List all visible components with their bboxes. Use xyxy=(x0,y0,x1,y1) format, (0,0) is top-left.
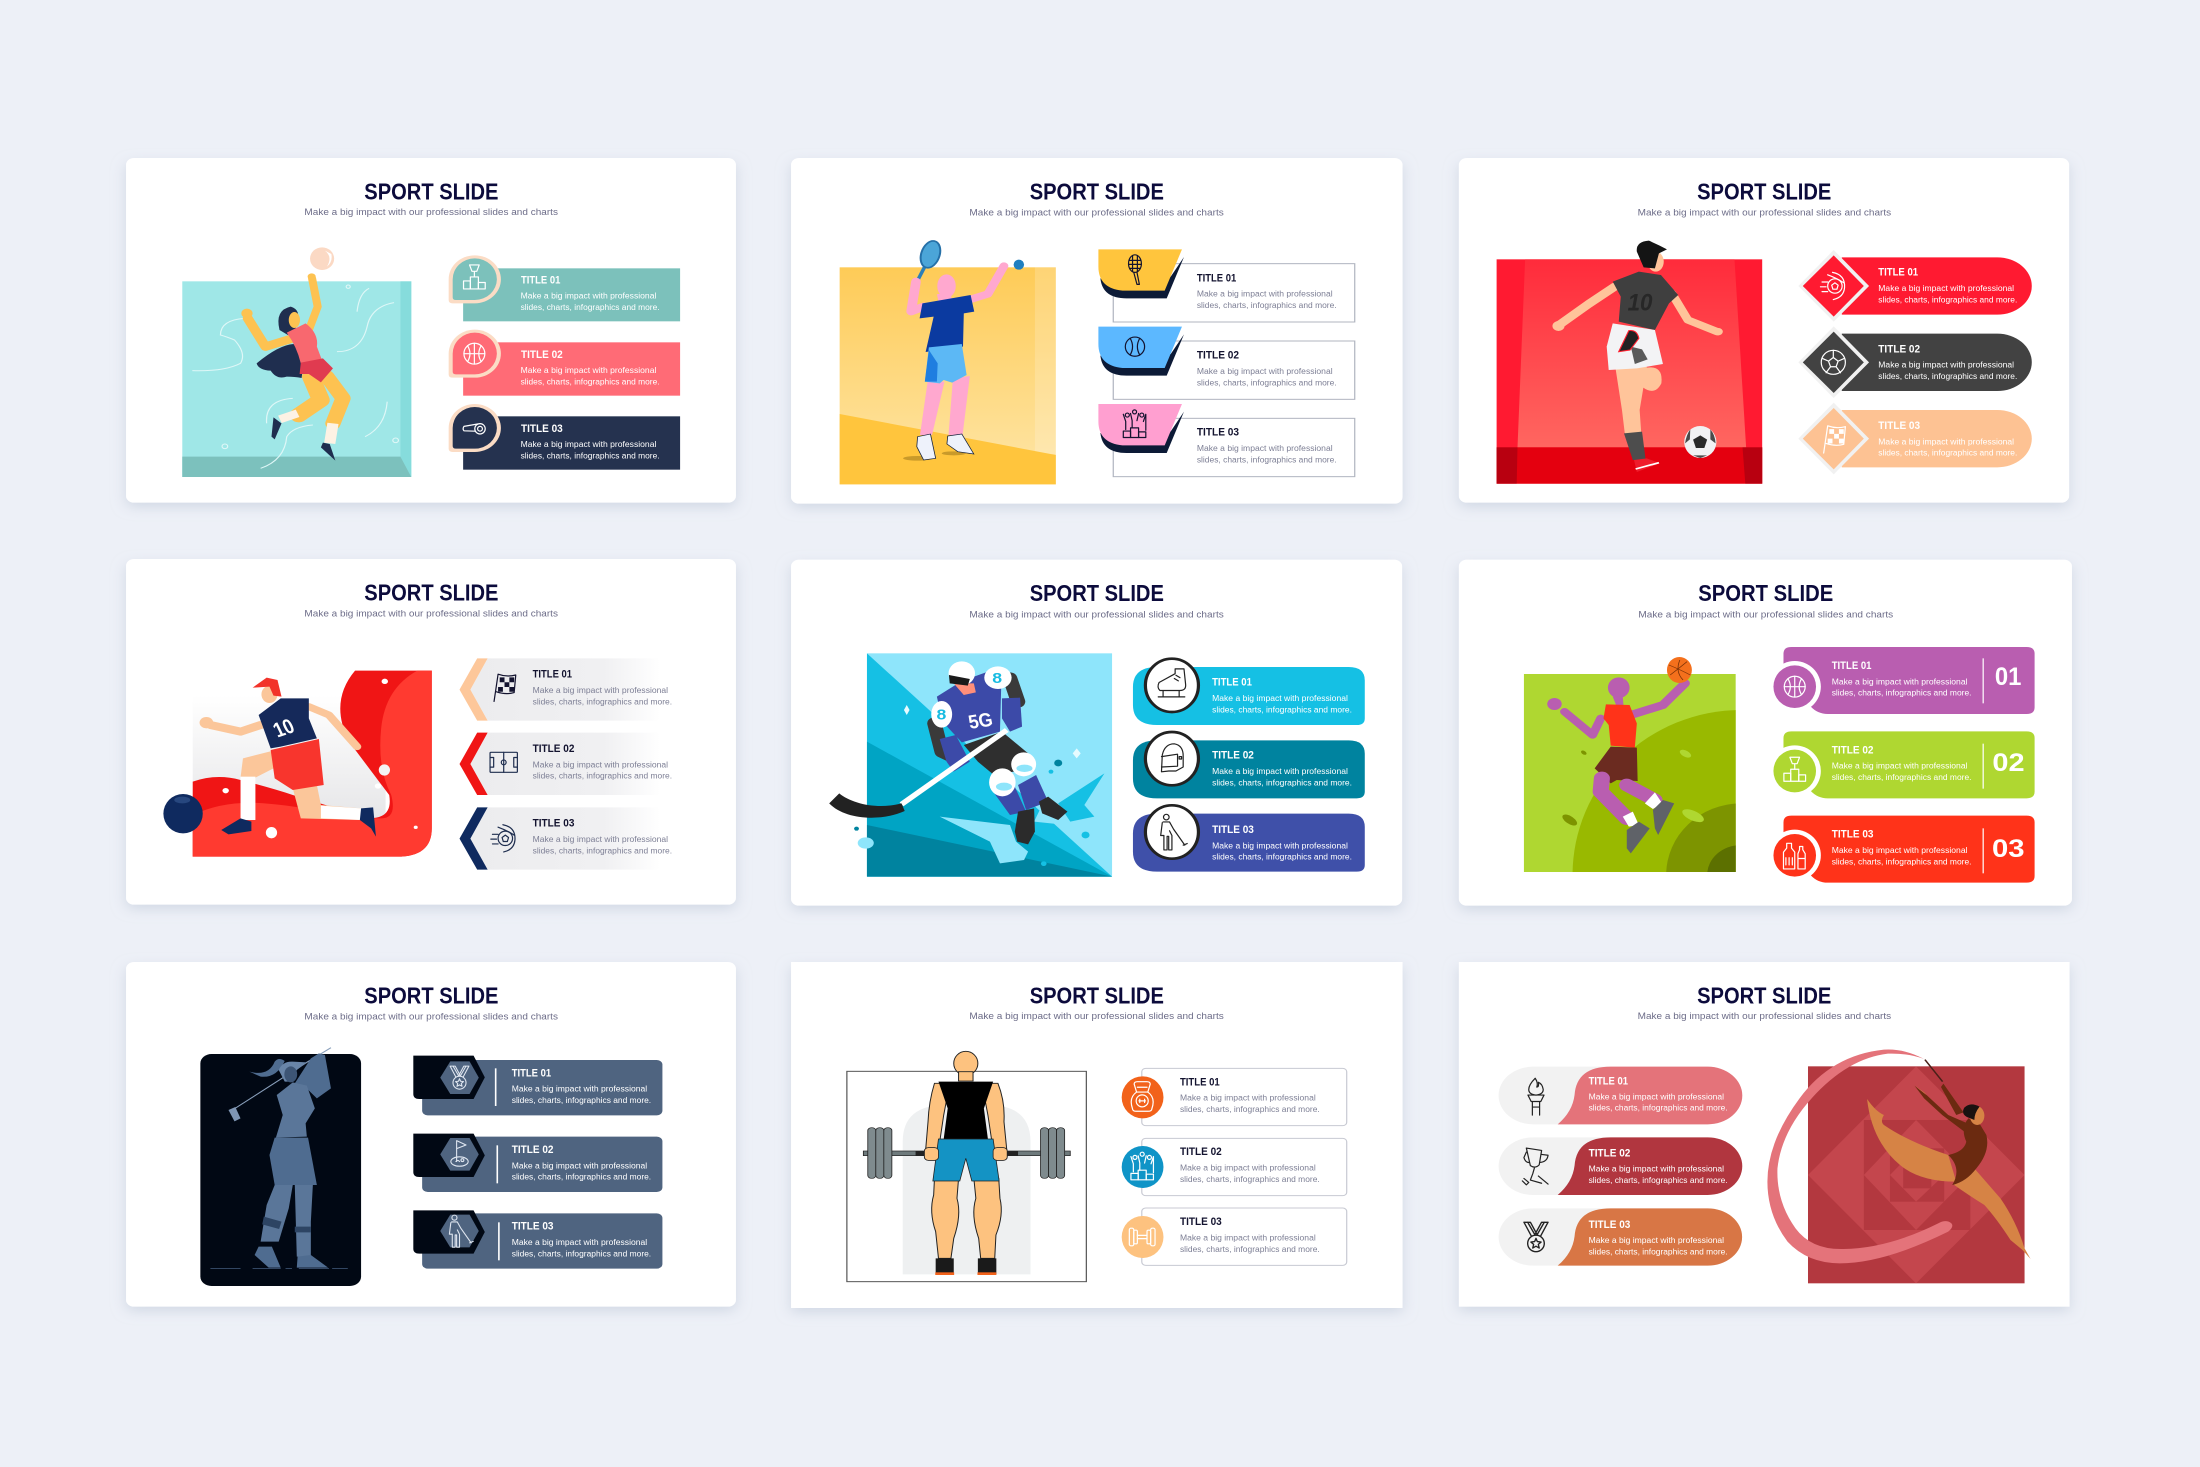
card: title 03: TITLE 03 xyxy=(1878,419,1920,432)
card: title 01: slides, charts, infographics and more. xyxy=(533,697,672,706)
heading: SPORT SLIDE xyxy=(1697,180,1831,205)
card: title 01: TITLE 01 xyxy=(1180,1075,1220,1088)
card: title 03: slides, charts, infographics and more. xyxy=(1212,852,1352,861)
card: title 03 xyxy=(1769,816,2035,883)
card: title 03: slides, charts, infographics and more. xyxy=(1878,448,2017,457)
card: title 01: TITLE 01 xyxy=(512,1066,551,1079)
card: title 02: Make a big impact with professional xyxy=(1197,367,1333,376)
heading: SPORT SLIDE xyxy=(1030,984,1164,1009)
card: title 01 xyxy=(449,255,680,321)
card: title 01 xyxy=(460,658,672,721)
panel: football kick slide xyxy=(126,559,736,905)
heading xyxy=(969,180,1224,218)
heading: Make a big impact with our professional slides and charts xyxy=(1638,1012,1891,1022)
card: title 01 xyxy=(1098,249,1355,322)
heading: SPORT SLIDE xyxy=(1030,180,1164,205)
illustration: hockey player: 5G xyxy=(966,709,995,733)
panel: soccer slide xyxy=(1459,158,2069,503)
illustration: soccer player: 10 xyxy=(1628,289,1653,316)
heading: Make a big impact with our professional slides and charts xyxy=(969,610,1224,620)
card: title 02 xyxy=(1499,1137,1742,1195)
card: title 03: TITLE 03 xyxy=(1197,426,1239,438)
illustration: volleyball player xyxy=(182,247,411,477)
heading: Make a big impact with our professional slides and charts xyxy=(969,208,1224,218)
card: title 01: Make a big impact with professional xyxy=(1832,677,1968,686)
card: title 03: Make a big impact with professional xyxy=(1197,444,1333,453)
card: title 03: TITLE 03 xyxy=(512,1220,554,1232)
card: title 01: slides, charts, infographics and more. xyxy=(1180,1105,1320,1114)
card: title 01: TITLE 01 xyxy=(1212,676,1252,688)
card: title 01 xyxy=(1122,1068,1347,1126)
card: title 02: TITLE 02 xyxy=(533,742,575,755)
card: title 01: slides, charts, infographics and more. xyxy=(512,1096,651,1105)
card: title 02: TITLE 02 xyxy=(1589,1147,1631,1159)
card: title 01: TITLE 01 xyxy=(1878,266,1918,278)
heading xyxy=(969,581,1224,620)
heading: Make a big impact with our professional slides and charts xyxy=(304,1012,558,1022)
heading: Make a big impact with our professional slides and charts xyxy=(1638,610,1893,620)
card: title 02: TITLE 02 xyxy=(1212,749,1254,761)
card: title 03: slides, charts, infographics and more. xyxy=(1589,1247,1728,1256)
card: title 02 xyxy=(1133,732,1365,798)
card: title 02: Make a big impact with professional xyxy=(1878,360,2014,369)
card: title 01: TITLE 01 xyxy=(1589,1074,1628,1087)
card: title 02: slides, charts, infographics and more. xyxy=(521,377,660,386)
card: title 03: Make a big impact with professional xyxy=(1180,1233,1316,1242)
card: title 02: Make a big impact with professional xyxy=(512,1161,647,1170)
card: title 01: TITLE 01 xyxy=(1832,659,1872,672)
card: title 01: TITLE 01 xyxy=(1197,271,1237,284)
card: title 02 xyxy=(1122,1138,1347,1196)
illustration: football player: 10 xyxy=(269,714,298,742)
card: title 02: slides, charts, infographics and more. xyxy=(512,1172,651,1181)
card: title 02: Make a big impact with professional xyxy=(533,760,668,769)
heading: SPORT SLIDE xyxy=(1697,984,1831,1009)
heading xyxy=(1638,180,1891,218)
illustration: weightlifter xyxy=(847,1051,1086,1282)
card: title 02: slides, charts, infographics and more. xyxy=(533,771,672,780)
card: title 01 xyxy=(413,1056,662,1115)
card: title 03 xyxy=(1133,805,1365,872)
card: title 02: Make a big impact with professional xyxy=(1832,761,1968,770)
card: title 02 xyxy=(449,330,680,396)
card: title 03 xyxy=(1798,403,2032,474)
card: title 03 xyxy=(460,807,672,870)
heading: SPORT SLIDE xyxy=(364,179,498,205)
card: title 01: Make a big impact with professional xyxy=(1197,289,1333,298)
illustration: football player xyxy=(163,671,432,857)
card: title 01 xyxy=(1499,1067,1742,1124)
illustration: tennis player xyxy=(840,239,1056,484)
panel: basketball slide xyxy=(1455,560,2076,914)
card: title 02 xyxy=(413,1134,662,1192)
card: title 03 xyxy=(1499,1208,1742,1266)
card: title 03: slides, charts, infographics and more. xyxy=(521,451,660,460)
card: title 02: slides, charts, infographics and more. xyxy=(1180,1175,1320,1184)
heading: SPORT SLIDE xyxy=(1030,581,1164,606)
card: title 02 xyxy=(1798,326,2032,398)
card: title 03: slides, charts, infographics and more. xyxy=(533,846,672,855)
card: title 01: Make a big impact with professional xyxy=(1180,1093,1316,1102)
heading: SPORT SLIDE xyxy=(1698,581,1833,606)
illustration: rhythmic gymnast xyxy=(1767,1050,2031,1283)
card: title 03: Make a big impact with professional xyxy=(1589,1236,1724,1245)
card: title 03: TITLE 03 xyxy=(1212,823,1254,836)
card: title 02: Make a big impact with professional xyxy=(1212,767,1348,776)
card: title 01: slides, charts, infographics and more. xyxy=(1197,301,1337,310)
card: title 01: slides, charts, infographics and more. xyxy=(521,303,660,312)
card: title 03: TITLE 03 xyxy=(521,422,563,435)
illustration: golfer xyxy=(200,1048,361,1286)
card: title 02 xyxy=(460,733,672,795)
card: title 02: slides, charts, infographics and more. xyxy=(1832,773,1972,782)
heading xyxy=(304,179,558,218)
card: title 01: 01 xyxy=(1995,662,2021,690)
card: title 02: slides, charts, infographics and more. xyxy=(1197,378,1337,387)
card: title 01: Make a big impact with professional xyxy=(1878,284,2014,293)
card: title 02 xyxy=(1098,327,1355,399)
card: title 03: Make a big impact with professional xyxy=(1878,437,2014,446)
card: title 03: slides, charts, infographics and more. xyxy=(512,1249,651,1258)
card: title 02: 02 xyxy=(1992,748,2025,776)
panel: ice hockey slide xyxy=(791,560,1402,906)
card: title 01: TITLE 01 xyxy=(533,668,572,680)
card: title 02: TITLE 02 xyxy=(1197,349,1239,361)
card: title 03: Make a big impact with professional xyxy=(512,1238,647,1247)
heading: Make a big impact with our professional slides and charts xyxy=(1638,208,1891,218)
card: title 02: TITLE 02 xyxy=(512,1143,554,1156)
card: title 03: slides, charts, infographics and more. xyxy=(1197,455,1337,464)
panel: weightlifting slide xyxy=(791,962,1403,1308)
card: title 01: slides, charts, infographics and more. xyxy=(1878,295,2017,304)
heading: Make a big impact with our professional slides and charts xyxy=(969,1012,1224,1022)
card: title 01: Make a big impact with professional xyxy=(1589,1092,1724,1101)
heading xyxy=(1638,984,1891,1022)
card: title 01: slides, charts, infographics and more. xyxy=(1589,1103,1728,1112)
card: title 02: TITLE 02 xyxy=(1180,1145,1222,1158)
card: title 03: TITLE 03 xyxy=(1180,1215,1222,1228)
card: title 03: slides, charts, infographics and more. xyxy=(1832,857,1972,866)
card: title 03: Make a big impact with professional xyxy=(521,440,656,449)
heading xyxy=(304,580,558,619)
illustration: soccer player xyxy=(1497,241,1762,484)
card: title 02: Make a big impact with professional xyxy=(521,366,656,375)
card: title 02 xyxy=(1769,731,2035,798)
card: title 01: Make a big impact with professional xyxy=(533,686,668,695)
card: title 03: Make a big impact with professional xyxy=(533,835,668,844)
card: title 03 xyxy=(1122,1208,1347,1265)
heading xyxy=(969,984,1224,1022)
heading: Make a big impact with our professional slides and charts xyxy=(304,208,558,218)
card: title 03: TITLE 03 xyxy=(1832,828,1874,840)
panel: volleyball slide xyxy=(126,158,736,503)
card: title 01: Make a big impact with professional xyxy=(521,291,656,300)
heading: SPORT SLIDE xyxy=(364,580,498,606)
card: title 03: slides, charts, infographics and more. xyxy=(1180,1245,1320,1254)
illustration: basketball player xyxy=(1524,657,1736,872)
heading xyxy=(304,984,558,1022)
illustration: hockey player: 8 xyxy=(992,670,1002,687)
card: title 03: 03 xyxy=(1992,834,2025,862)
card: title 01: slides, charts, infographics and more. xyxy=(1832,688,1972,697)
card: title 02: Make a big impact with professional xyxy=(1589,1164,1724,1173)
card: title 03: Make a big impact with professional xyxy=(1212,841,1348,850)
card: title 01: TITLE 01 xyxy=(521,274,561,286)
card: title 03: Make a big impact with professional xyxy=(1832,846,1968,855)
illustration: hockey player xyxy=(829,653,1112,877)
card: title 02: TITLE 02 xyxy=(521,348,563,361)
panel: rhythmic gymnastics slide xyxy=(1459,962,2070,1307)
card: title 03: TITLE 03 xyxy=(533,817,575,829)
card: title 02: slides, charts, infographics and more. xyxy=(1878,372,2017,381)
card: title 03 xyxy=(413,1210,662,1269)
card: title 01 xyxy=(1769,647,2035,714)
heading xyxy=(1638,581,1893,620)
card: title 01: slides, charts, infographics and more. xyxy=(1212,705,1352,714)
card: title 03 xyxy=(1098,404,1355,477)
card: title 01: Make a big impact with professional xyxy=(512,1084,647,1093)
card: title 03: TITLE 03 xyxy=(1589,1218,1631,1231)
card: title 01 xyxy=(1133,659,1365,725)
card: title 02: TITLE 02 xyxy=(1832,743,1874,756)
card: title 01 xyxy=(1798,250,2032,322)
card: title 01: Make a big impact with professional xyxy=(1212,694,1348,703)
card: title 02: slides, charts, infographics and more. xyxy=(1589,1176,1728,1185)
heading: Make a big impact with our professional slides and charts xyxy=(304,609,558,619)
heading: SPORT SLIDE xyxy=(364,984,498,1009)
illustration: hockey player: 8 xyxy=(936,707,946,723)
card: title 03 xyxy=(449,404,680,470)
card: title 02: TITLE 02 xyxy=(1878,342,1920,355)
panel: tennis slide xyxy=(791,158,1403,504)
card: title 02: Make a big impact with professional xyxy=(1180,1163,1316,1172)
card: title 02: slides, charts, infographics and more. xyxy=(1212,778,1352,787)
panel: golf slide xyxy=(126,962,736,1307)
